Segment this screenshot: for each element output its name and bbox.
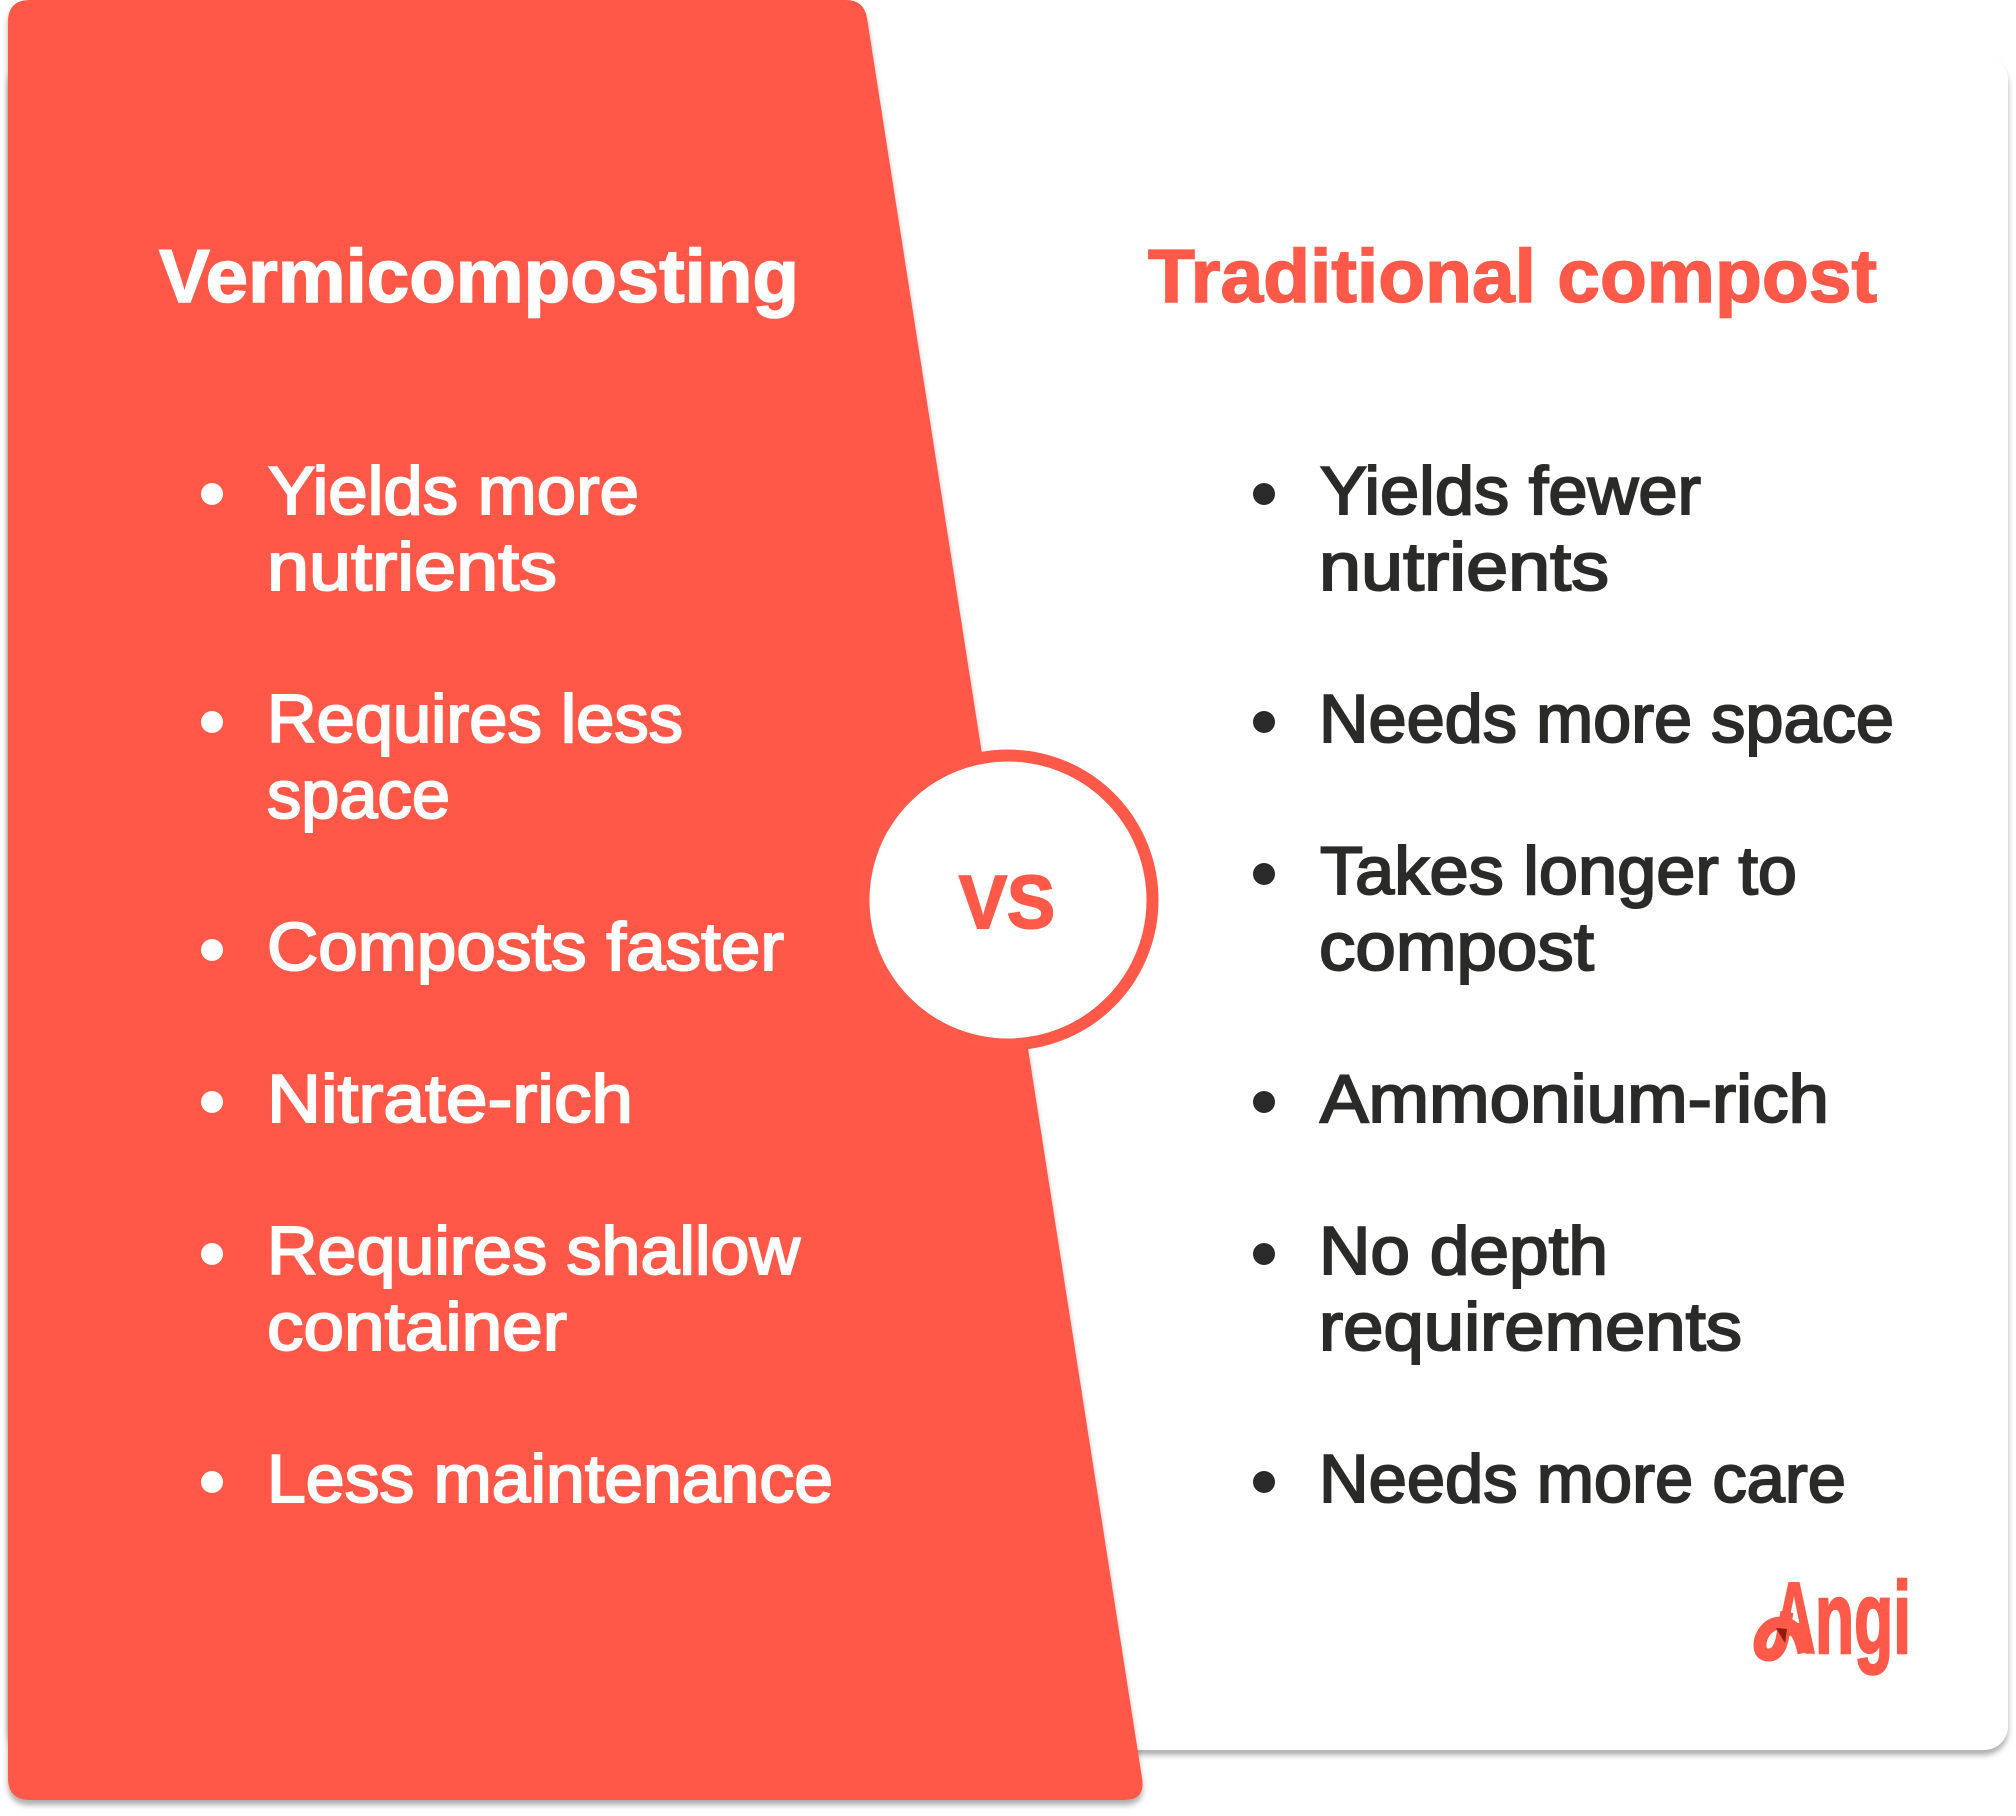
item: requires shallow container: Requires shallow	[267, 1213, 801, 1289]
item: ammonium-rich: Ammonium-rich	[1320, 1061, 1829, 1137]
item: takes longer to compost: Takes longer to	[1320, 833, 1797, 909]
panel: vermicomposting slanted background	[8, 0, 1143, 1800]
item: needs more space: Needs more space	[1319, 681, 1894, 757]
item: requires shallow container: container	[267, 1289, 567, 1365]
item: no depth requirements	[1253, 1213, 1742, 1365]
item: nitrate-rich: Nitrate-rich	[267, 1061, 633, 1137]
item: composts faster: Composts faster	[267, 909, 784, 985]
item: yields fewer nutrients: nutrients	[1319, 529, 1609, 605]
item: yields fewer nutrients	[1253, 453, 1701, 605]
badge: VS circle: VS	[959, 860, 1055, 944]
item: no depth requirements: No depth	[1319, 1213, 1608, 1289]
item: requires less space: Requires less	[267, 681, 683, 757]
item: requires less space	[201, 681, 683, 833]
item: requires shallow container	[201, 1213, 801, 1365]
item: yields more nutrients: nutrients	[267, 529, 557, 605]
item: needs more care: Needs more care	[1319, 1441, 1846, 1517]
item: less maintenance: Less maintenance	[267, 1441, 833, 1517]
item: yields more nutrients	[201, 453, 639, 605]
logo: Angi	[1760, 1561, 1911, 1675]
badge: VS circle	[864, 756, 1152, 1044]
item: takes longer to compost: compost	[1319, 909, 1594, 985]
item: yields more nutrients: Yields more	[268, 453, 639, 529]
item: takes longer to compost	[1253, 833, 1797, 985]
logo: Angi: A	[1772, 1561, 1816, 1675]
list: traditional compost traits	[1253, 453, 1894, 1517]
heading: Vermicomposting: Vermicomposting	[159, 234, 799, 318]
item: no depth requirements: requirements	[1319, 1289, 1742, 1365]
item: yields fewer nutrients: Yields fewer	[1320, 453, 1701, 529]
list: vermicomposting traits	[201, 453, 833, 1517]
item: requires less space: space	[267, 757, 450, 833]
heading: Traditional compost: Traditional compost	[1148, 234, 1877, 318]
logo: Angi: ngi	[1815, 1561, 1911, 1675]
